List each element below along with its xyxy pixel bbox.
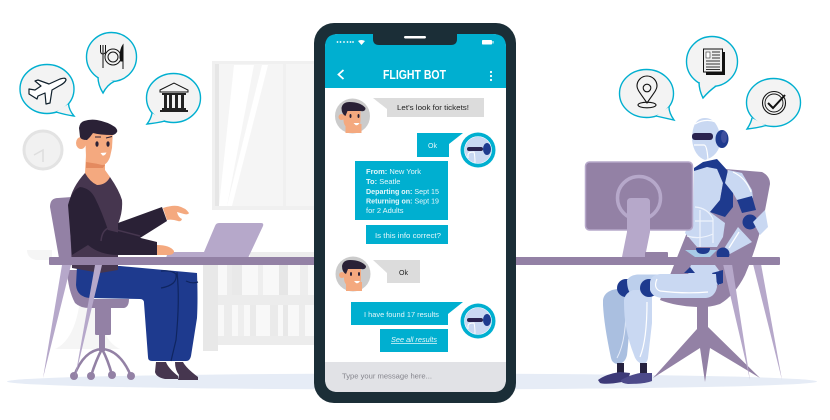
back chevron (338, 70, 344, 79)
right desk (510, 257, 780, 265)
right desk legs (723, 264, 782, 380)
message: flight details: From: New York (366, 167, 421, 176)
message: results found: I have found 17 results (364, 310, 439, 319)
man's near arm and hand (68, 187, 174, 255)
message: let's look (373, 98, 484, 117)
robot's forearm and hand (716, 210, 768, 260)
message: ok from user (373, 260, 420, 283)
robot's pelvis (684, 248, 723, 285)
message input bar (325, 362, 506, 392)
message: is this correct: Is this info correct? (375, 231, 441, 240)
robot's far leg (598, 274, 660, 384)
message input bar: Type your message here... (342, 372, 432, 380)
man's chair (50, 197, 135, 380)
bubble: check (746, 78, 800, 129)
message: let's look: Let's look for tickets! (397, 103, 469, 112)
message: see all results: See all results (391, 335, 437, 344)
message: is this correct (366, 225, 448, 244)
icon: map pin (637, 76, 657, 108)
bubble: restaurant (86, 32, 136, 93)
avatar: man 1 (335, 98, 370, 134)
icon: plate and cutlery (100, 45, 123, 69)
message: ok from bot: Ok (428, 141, 437, 150)
robot's torso (685, 167, 725, 247)
icon: check badge (762, 92, 786, 114)
menu dots (490, 71, 492, 81)
message: ok from user: Ok (399, 268, 408, 277)
background lamp shadow (27, 250, 120, 349)
man's trousers (76, 266, 198, 361)
message: flight details: Departing on: Sept 15 (366, 187, 439, 196)
title: FLIGHT BOT (383, 68, 446, 82)
avatar: robot 2 (460, 304, 496, 338)
message: flight details: for 2 Adults (366, 206, 404, 215)
icon: plane (29, 78, 66, 104)
message: see all results (380, 329, 448, 352)
message: flight details: Returning on: Sept 19 (366, 196, 439, 206)
wall clock (24, 131, 62, 169)
left desk legs (43, 265, 102, 378)
robot's near leg (621, 274, 717, 384)
message: flight details (355, 161, 448, 220)
bubble: museum (146, 74, 200, 124)
phone screen (325, 34, 506, 392)
background bookshelf (203, 252, 316, 351)
robot's head (692, 118, 728, 160)
bubble: location (620, 70, 674, 120)
phone header (325, 34, 506, 88)
man's head (76, 120, 117, 185)
man (68, 120, 198, 380)
man's torso (69, 173, 122, 273)
man's shoes (155, 362, 198, 380)
background window (212, 61, 316, 210)
floor shadow (7, 374, 817, 390)
message: results found (351, 302, 463, 325)
laptop (166, 223, 263, 258)
message: flight details: To: Seatle (366, 177, 400, 186)
robot (598, 118, 768, 384)
icon: newspaper (704, 49, 725, 75)
man's far arm and hand (118, 206, 189, 240)
avatar: robot 1 (460, 132, 496, 168)
left desk (49, 257, 319, 265)
icon: museum building (160, 83, 188, 112)
bubble: document (686, 36, 738, 98)
phone (314, 23, 516, 403)
bubble: plane (20, 64, 74, 116)
robot's upper arm (725, 170, 756, 213)
phone body (314, 23, 516, 403)
avatar: man 2 (336, 256, 370, 292)
robot's abdomen lines (687, 207, 713, 247)
robot's chest armour (694, 159, 733, 217)
computer monitor (586, 162, 692, 258)
robot's chair (653, 169, 770, 382)
message: ok from bot (417, 133, 463, 157)
